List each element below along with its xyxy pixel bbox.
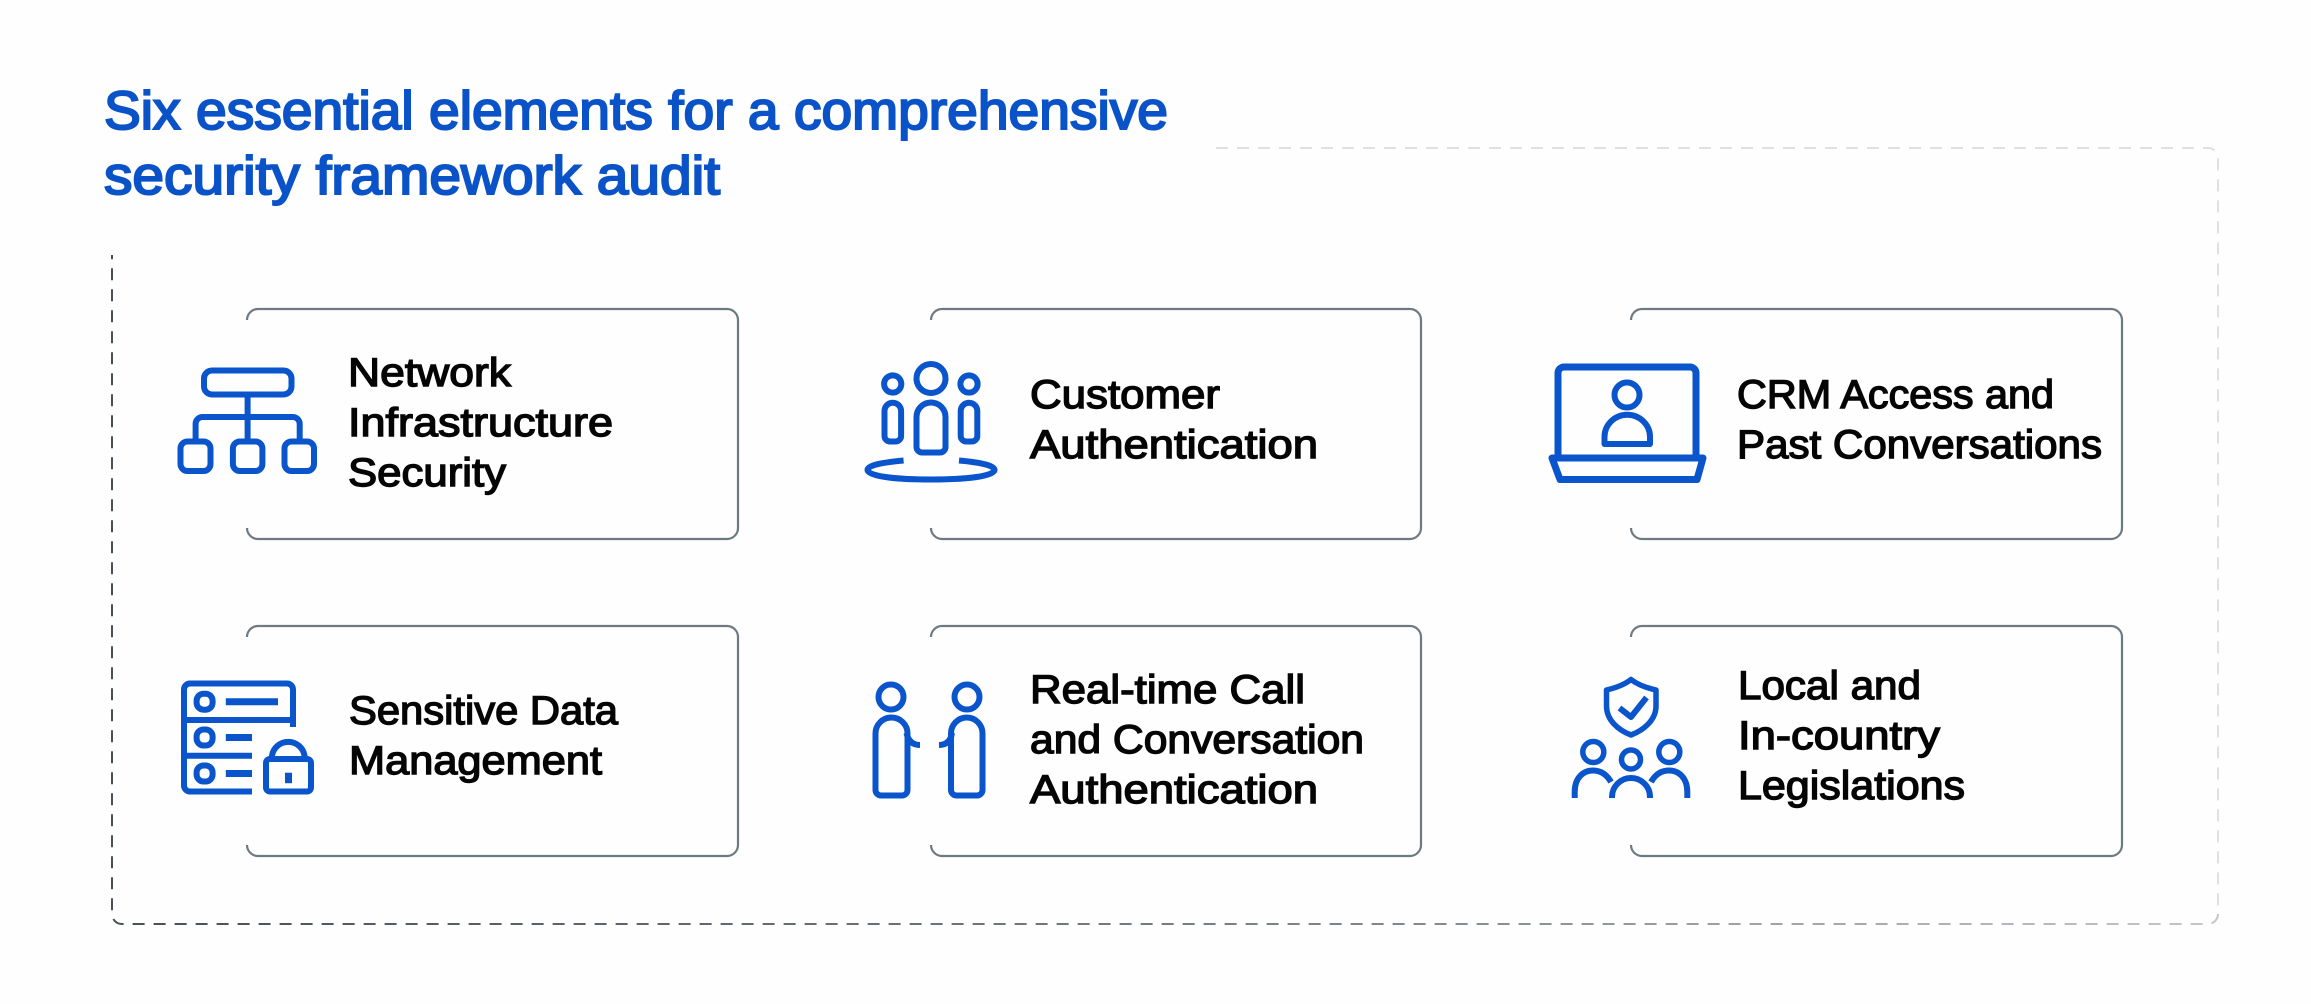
label: Real-time Call and Conversation Authentication: and Conversation bbox=[1030, 718, 1364, 762]
label: CRM Access and Past Conversations: CRM Access and bbox=[1737, 373, 2054, 417]
panel: Network Infrastructure Security bbox=[180, 309, 738, 539]
label: Customer Authentication: Customer bbox=[1030, 373, 1220, 417]
label: Sensitive Data Management: Management bbox=[349, 739, 602, 783]
label: Local and In-country Legislations: Legislations bbox=[1738, 764, 1965, 808]
label: Real-time Call and Conversation Authentication bbox=[1030, 668, 1364, 812]
panel: Local and In-country Legislations bbox=[1575, 626, 2122, 856]
icon: two people talking bbox=[876, 684, 982, 796]
label: Local and In-country Legislations: Local and bbox=[1738, 664, 1921, 708]
label: Local and In-country Legislations: In-country bbox=[1738, 714, 1940, 758]
dashed frame bbox=[112, 148, 2218, 924]
panel: Sensitive Data Management bbox=[184, 626, 738, 856]
label: Network Infrastructure Security: Security bbox=[348, 451, 506, 495]
label: Local and In-country Legislations bbox=[1738, 664, 1965, 808]
icon: network hierarchy bbox=[180, 370, 314, 471]
label: Customer Authentication bbox=[1030, 373, 1318, 467]
title bbox=[104, 81, 1168, 206]
label: Sensitive Data Management bbox=[349, 689, 619, 783]
panel: Customer Authentication bbox=[868, 309, 1421, 539]
label: Sensitive Data Management: Sensitive Data bbox=[349, 689, 619, 733]
label: Network Infrastructure Security: Infrastructure bbox=[348, 401, 613, 445]
icon: group of people on a ring bbox=[868, 364, 994, 480]
icon: laptop with user bbox=[1552, 367, 1703, 480]
label: Network Infrastructure Security: Network bbox=[348, 351, 512, 395]
panel: CRM Access and Past Conversations bbox=[1552, 309, 2122, 539]
title: Six essential elements for a comprehensive bbox=[104, 81, 1168, 141]
icon: data list with padlock bbox=[184, 684, 311, 792]
label: Network Infrastructure Security bbox=[348, 351, 613, 495]
icon: shield with people bbox=[1575, 680, 1687, 798]
panel: Real-time Call and Conversation Authentication bbox=[876, 626, 1421, 856]
label: Real-time Call and Conversation Authentication: Real-time Call bbox=[1030, 668, 1305, 712]
label: CRM Access and Past Conversations bbox=[1737, 373, 2102, 467]
label: Customer Authentication: Authentication bbox=[1030, 423, 1318, 467]
label: Real-time Call and Conversation Authentication: Authentication bbox=[1030, 768, 1318, 812]
title: security framework audit bbox=[104, 146, 720, 206]
label: CRM Access and Past Conversations: Past Conversations bbox=[1737, 423, 2102, 467]
